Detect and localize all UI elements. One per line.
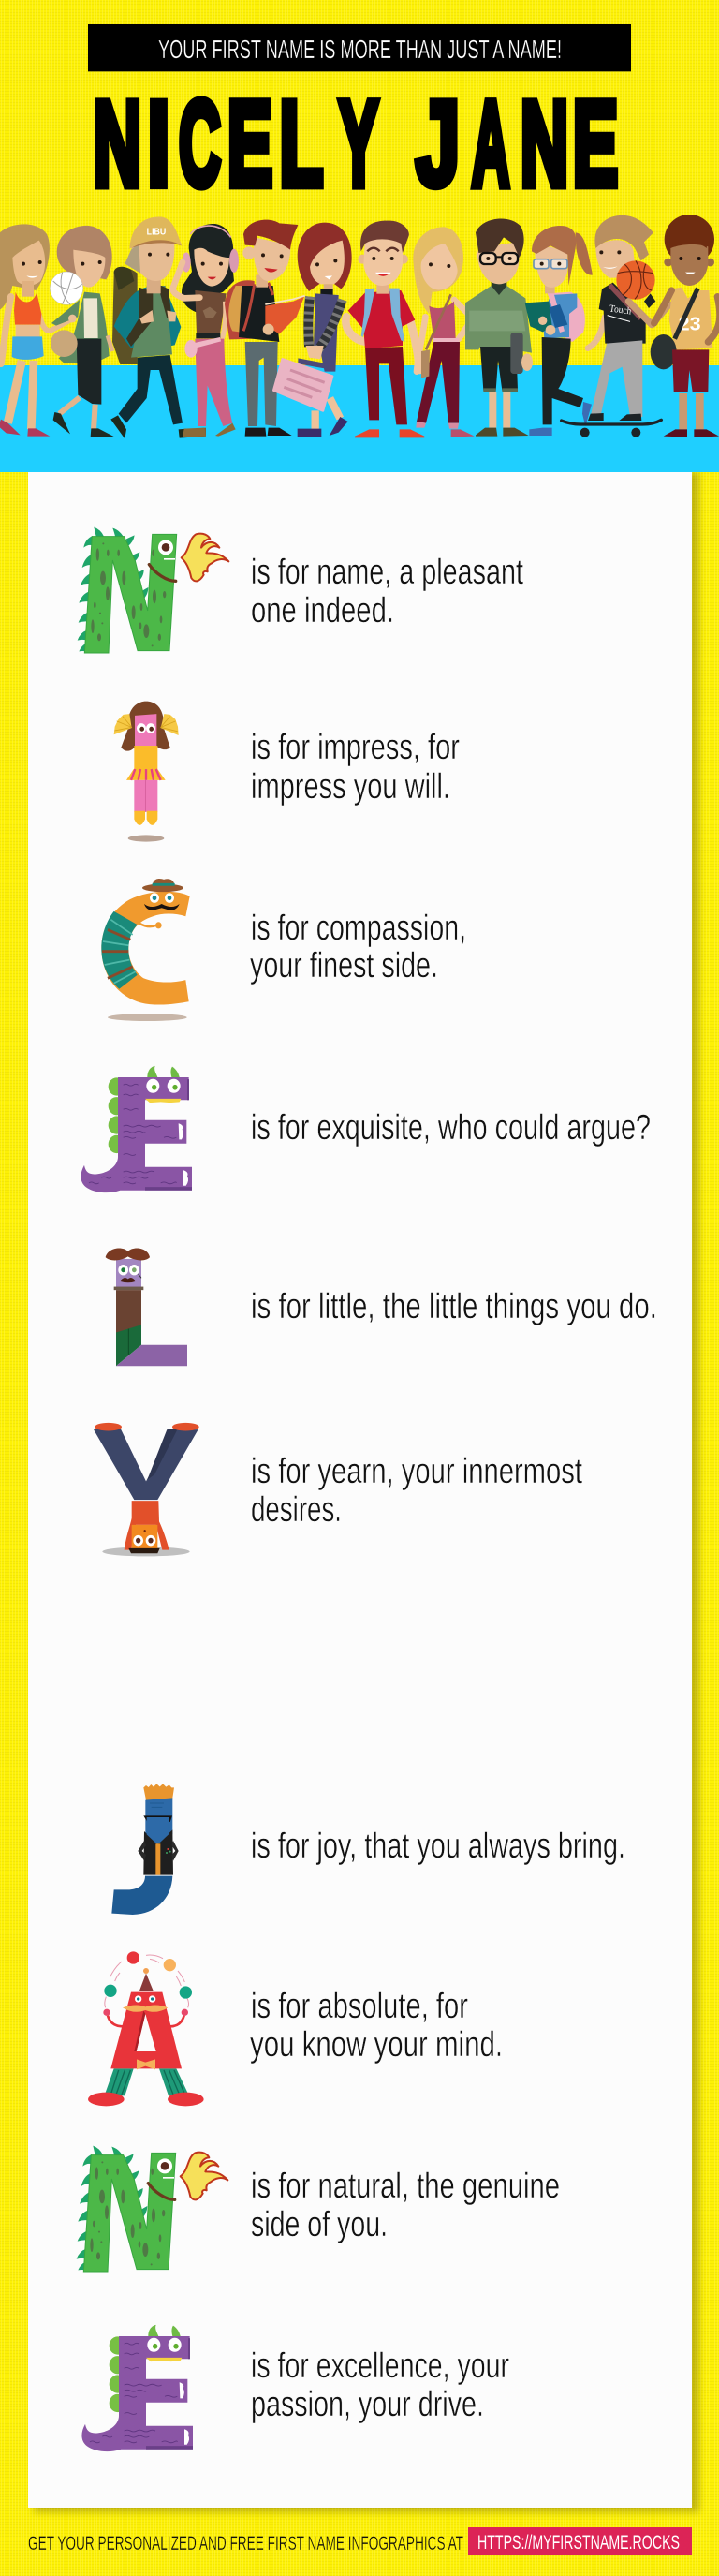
title: NICELY JANE: Y (339, 78, 378, 211)
header bar (88, 24, 631, 72)
title: NICELY JANE: E (573, 78, 618, 212)
text: N second: side of you. (251, 2205, 388, 2244)
title: NICELY JANE: L (279, 77, 323, 211)
icon: cheerleader letter I (114, 702, 179, 842)
row: N second (77, 2146, 560, 2272)
illustration: crowd of students (0, 215, 719, 438)
person: girl with headphones (173, 224, 239, 437)
title: NICELY JANE: C (179, 78, 221, 212)
person: girl with pink backpack and tablet (525, 226, 593, 436)
text: N: one indeed. (251, 591, 394, 630)
title: NICELY JANE (94, 76, 618, 212)
person: boy in yellow tank top (651, 215, 719, 437)
icon: dragon letter E (81, 1066, 192, 1192)
person: boy with black glasses (465, 218, 533, 437)
row: Y (94, 1423, 582, 1556)
row: E (81, 1066, 651, 1192)
icon: dragon letter N second (77, 2146, 227, 2272)
footer link badge (468, 2527, 692, 2555)
text: E second: is for excellence, your (251, 2347, 509, 2386)
text: E second: passion, your drive. (251, 2385, 484, 2424)
person: boy in yellow tank top: 23 (679, 313, 701, 334)
row: L (106, 1248, 657, 1366)
title: NICELY JANE: I (147, 78, 170, 212)
text: Y: is for yearn, your innermost (251, 1452, 582, 1491)
title: NICELY JANE: A (472, 77, 509, 211)
text: A: you know your mind. (250, 2025, 503, 2065)
group: four people on the right (465, 215, 719, 437)
title: NICELY JANE: N (521, 76, 568, 211)
row: A (88, 1951, 503, 2106)
row: J (111, 1784, 625, 1915)
person: girl with volleyball (50, 226, 114, 437)
text: A: is for absolute, for (251, 1987, 468, 2026)
text: Y: desires. (251, 1490, 342, 1530)
title: NICELY JANE: E (227, 78, 272, 212)
title: NICELY JANE: N (94, 76, 141, 211)
row: N (78, 527, 523, 653)
icon: sunglasses letter J (111, 1784, 179, 1915)
icon: dragon letter N (78, 527, 228, 653)
panel shadow (34, 472, 699, 2512)
person: boy in red t-shirt (345, 221, 424, 437)
group: four people in the middle (225, 220, 475, 437)
panel: letters card (28, 472, 692, 2508)
icon: handstand letter Y (94, 1423, 199, 1556)
person: girl in orange top (0, 224, 73, 437)
row: I (114, 702, 460, 842)
person: backpacker with cap (110, 216, 206, 438)
group: four people on the left (0, 216, 239, 438)
text: I: is for impress, for (251, 728, 460, 767)
icon: detective letter L (106, 1248, 187, 1366)
text: C: is for compassion, (251, 909, 466, 948)
person: backpacker with cap: LIBU (147, 227, 166, 237)
text: N: is for name, a pleasant (251, 553, 523, 592)
footer call to action: GET YOUR PERSONALIZED AND FREE FIRST NAME INFOGRAPHICS AT (28, 2533, 463, 2554)
person: red-haired girl with pink bag (273, 223, 352, 437)
text: N second: is for natural, the genuine (251, 2167, 560, 2206)
floor band: blue (0, 365, 719, 472)
icon: cowboy letter C (101, 879, 190, 1021)
person: skater with basketball: Touch (609, 303, 632, 318)
icon: juggling clown letter A (88, 1951, 204, 2106)
text: C: your finest side. (250, 946, 438, 985)
row: C (101, 879, 466, 1021)
person: skater with basketball (562, 215, 669, 437)
row: E second (81, 2325, 509, 2451)
person: blonde girl (413, 227, 475, 437)
title: NICELY JANE: J (416, 77, 460, 211)
icon: dragon letter E second (81, 2325, 193, 2451)
person: boy with open book (225, 220, 305, 437)
text: I: impress you will. (251, 767, 450, 807)
